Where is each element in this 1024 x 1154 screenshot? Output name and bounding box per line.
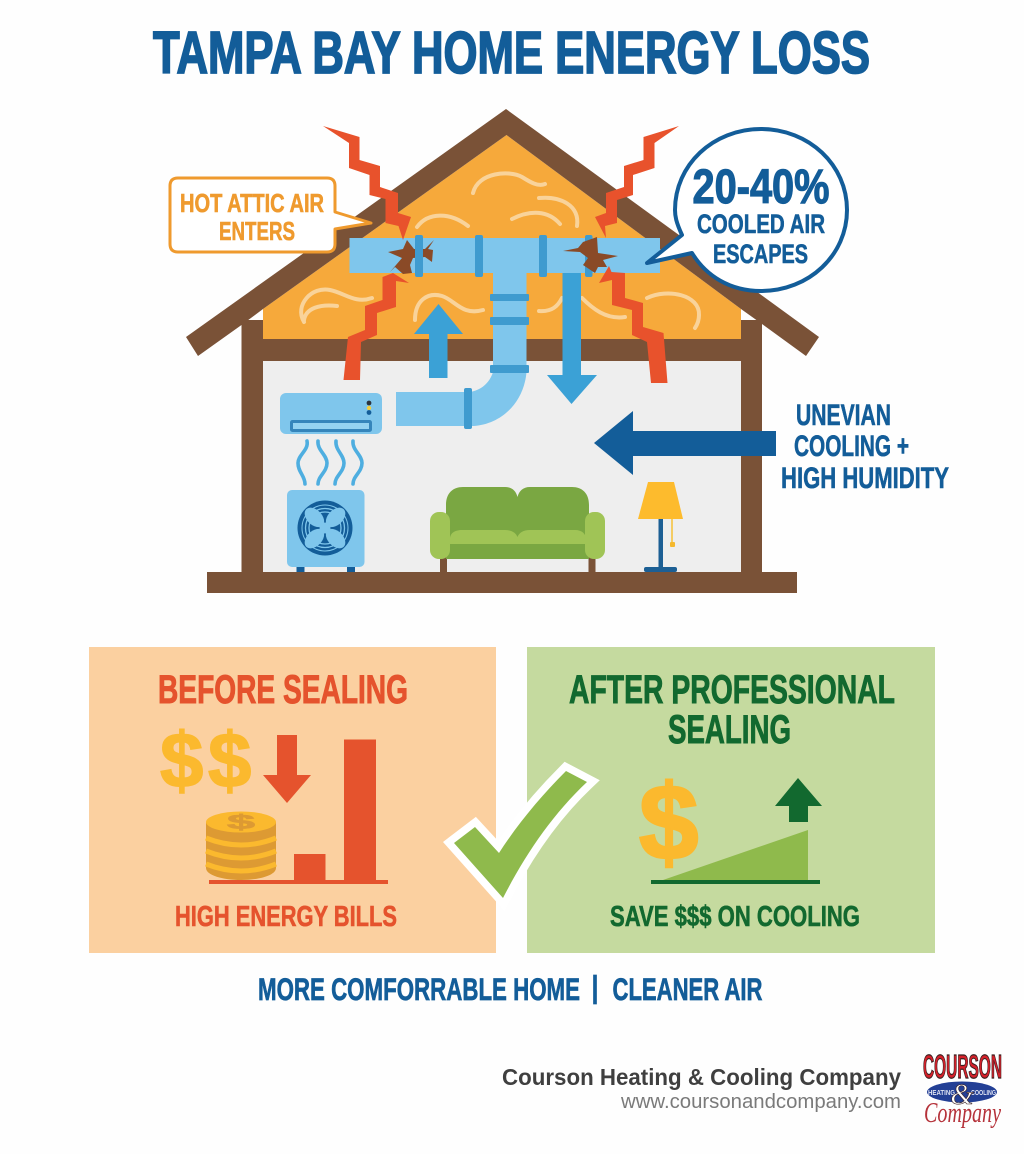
hot air bolt lower left bbox=[344, 273, 409, 380]
before heading: BEFORE SEALING bbox=[158, 668, 408, 712]
airflow arrow up bbox=[414, 304, 463, 378]
label: uneven cooling and humidity: HIGH HUMIDITY bbox=[781, 462, 949, 495]
company logo: HEATING bbox=[928, 1090, 955, 1097]
icon: dollar sign: $ bbox=[639, 762, 699, 882]
duct system bbox=[350, 235, 660, 429]
indoor AC unit bbox=[280, 393, 382, 434]
callout: 20-40% cooled air escapes: COOLED AIR bbox=[697, 209, 825, 239]
room interior bbox=[263, 361, 741, 572]
airflow arrow down bbox=[547, 273, 597, 404]
benefits line: MORE COMFORRABLE HOME bbox=[258, 971, 580, 1007]
floor lamp bbox=[638, 482, 683, 572]
duct crack left bbox=[388, 240, 434, 274]
hot air bolt top left bbox=[323, 126, 411, 240]
label: uneven cooling and humidity: COOLING + bbox=[794, 430, 909, 463]
duct crack right bbox=[563, 237, 618, 273]
icon: coin stack bbox=[206, 812, 276, 880]
after caption: SAVE $$$ ON COOLING bbox=[610, 901, 860, 933]
bar chart: rising bills bbox=[209, 740, 388, 884]
icon: dollar signs: $ bbox=[208, 716, 251, 804]
big blue arrow: uneven cooling bbox=[594, 411, 776, 475]
company logo: COOLING bbox=[971, 1090, 996, 1097]
insulation swirls bbox=[301, 173, 699, 328]
callout: hot attic air bbox=[170, 178, 371, 252]
sofa bbox=[430, 487, 605, 572]
after heading: SEALING bbox=[668, 708, 791, 752]
cool air waves bbox=[298, 441, 362, 484]
icon: dollar signs bbox=[160, 716, 251, 804]
benefits line: CLEANER AIR bbox=[612, 971, 763, 1007]
icon: coin stack: $ bbox=[227, 812, 255, 834]
icon: check mark bbox=[454, 771, 587, 898]
icon: savings wedge bbox=[663, 830, 808, 880]
callout: 20-40% cooled air escapes: ESCAPES bbox=[713, 239, 808, 269]
callout: hot attic air: HOT ATTIC AIR bbox=[180, 188, 324, 218]
panel: before sealing bbox=[89, 647, 496, 953]
company logo bbox=[923, 1048, 1002, 1129]
callout: hot attic air: ENTERS bbox=[219, 216, 295, 246]
hot air bolt top right bbox=[595, 126, 679, 238]
footer website: www.coursonandcompany.com bbox=[620, 1091, 901, 1113]
footer company name: Courson Heating & Cooling Company bbox=[502, 1064, 901, 1090]
chart baseline bbox=[651, 880, 820, 884]
house illustration bbox=[186, 109, 819, 593]
house frame bbox=[186, 109, 819, 593]
icon: up arrow bbox=[775, 778, 822, 822]
label: uneven cooling and humidity bbox=[781, 399, 949, 495]
duct band over left crack bbox=[415, 235, 423, 277]
panel: after professional sealing bbox=[527, 647, 935, 953]
attic insulation bbox=[263, 135, 741, 339]
before caption: HIGH ENERGY BILLS bbox=[175, 901, 397, 933]
label: uneven cooling and humidity: UNEVIAN bbox=[796, 399, 891, 432]
after heading bbox=[569, 668, 895, 752]
callout: 20-40% cooled air escapes: 20-40% bbox=[692, 161, 830, 214]
icon: down arrow bbox=[263, 735, 311, 803]
hot air bolt lower right bbox=[599, 266, 668, 383]
outdoor condenser unit bbox=[287, 490, 364, 572]
callout: 20-40% cooled air escapes bbox=[647, 129, 847, 291]
after heading: AFTER PROFESSIONAL bbox=[569, 668, 895, 712]
company logo: & bbox=[950, 1078, 974, 1111]
icon: dollar signs: $ bbox=[160, 716, 203, 804]
